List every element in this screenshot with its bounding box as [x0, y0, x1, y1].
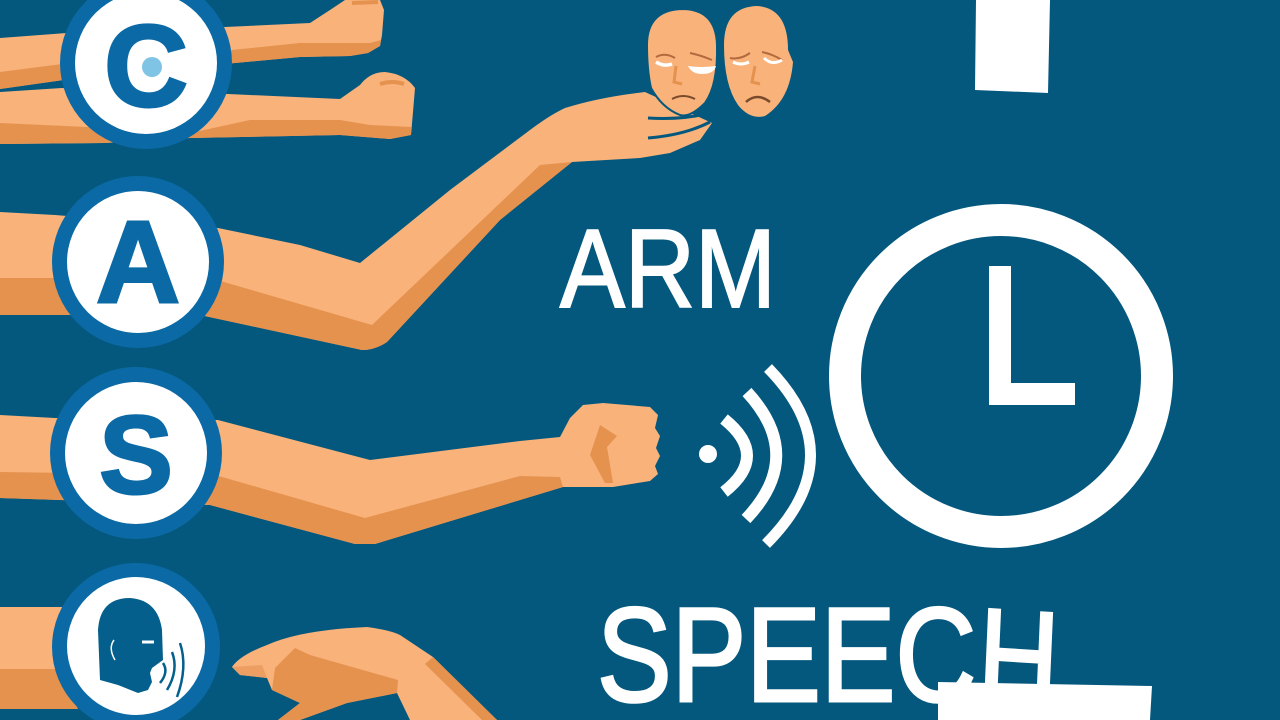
- arm with fist: [0, 403, 660, 544]
- clock icon: [845, 220, 1157, 532]
- letter badge S: S: [99, 394, 173, 517]
- letter badge C: [60, 0, 232, 149]
- white rectangle bottom: [938, 682, 1152, 720]
- letter badge speech: [52, 563, 220, 720]
- sad face left: [647, 9, 717, 116]
- letter badge A: [52, 176, 224, 348]
- label ARM: ARM: [560, 207, 776, 331]
- arm stub bottom: [0, 607, 78, 709]
- top arm two with fist: [0, 72, 415, 144]
- sad face right: [724, 6, 793, 117]
- long arm reaching to faces: [0, 92, 712, 350]
- sound waves icon: [699, 368, 811, 544]
- letter badge S: [50, 367, 222, 539]
- top arm one with fist: [0, 0, 384, 89]
- bottom hand: [232, 627, 497, 720]
- white rectangle top: [975, 0, 1050, 93]
- letter badge A: A: [96, 197, 180, 327]
- letter badge C: C: [104, 1, 188, 131]
